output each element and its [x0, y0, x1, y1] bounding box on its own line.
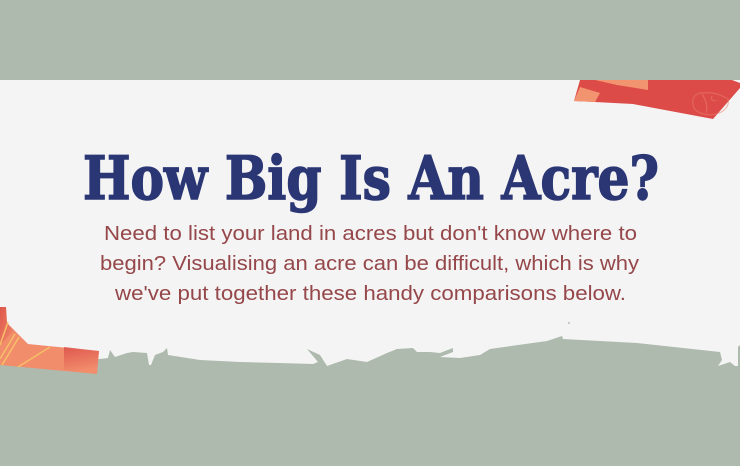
red texture right end [64, 347, 99, 373]
intro line 2: begin? Visualising an acre can be difficult, which is why [100, 252, 640, 275]
intro line 3: we've put together these handy comparisons below. [114, 282, 626, 305]
torn paper: bottom left orange scrap [0, 307, 99, 374]
salmon strip [595, 80, 648, 90]
orange scrap base [0, 307, 99, 374]
salmon corner patch [574, 87, 600, 102]
red scrap base [574, 80, 740, 119]
intro line 1: Need to list your land in acres but don't know where to [104, 222, 637, 245]
torn paper: top right red scrap [574, 80, 740, 119]
intro text [100, 222, 640, 305]
small speck [568, 322, 570, 324]
faint floral texture [693, 93, 728, 115]
torn white paper panel [0, 80, 740, 366]
yellow lines [0, 322, 50, 367]
red texture top left [0, 307, 14, 345]
